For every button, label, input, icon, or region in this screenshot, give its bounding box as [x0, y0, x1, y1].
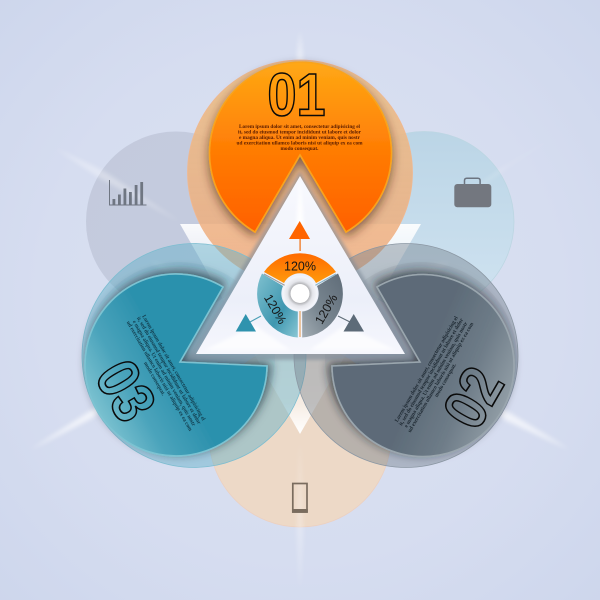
- text block 03: e magna aliqua. Ut enim ad minim veniam, quis nostr: [131, 320, 197, 428]
- text block 01: e magna aliqua. Ut enim ad minim veniam, quis nostr: [239, 135, 360, 141]
- centre pie chart: [257, 253, 343, 338]
- back circle: grey: [86, 132, 266, 312]
- panel 02: slate pie: [332, 275, 517, 457]
- marker: slate triangle: [338, 314, 364, 332]
- number 01: 01: [268, 62, 326, 128]
- separators: [264, 274, 336, 337]
- slate outer translucent circle: [294, 244, 518, 468]
- hub centre: [290, 284, 310, 303]
- icon: smartphone: [292, 484, 308, 513]
- back circle: light blue: [334, 132, 514, 312]
- text block 02: Lorem ipsum dolor sit amet, consectetur adipisicing el: [394, 315, 460, 423]
- text block 03: ud exercitation ullamco laboris nisi ut aliquip ex ea com: [125, 320, 193, 433]
- teal outer translucent circle: [82, 244, 306, 468]
- large pale inverted triangle: [180, 224, 421, 434]
- text block 02: e magna aliqua. Ut enim ad minim veniam, quis nostr: [404, 321, 469, 429]
- text block 02: it, sed do eiusmod tempor incididunt ut labore et dolor: [398, 317, 465, 427]
- offset glass ring: teal: [83, 262, 275, 454]
- number 02: 02: [430, 356, 517, 440]
- label: 120% orange: 120%: [284, 260, 316, 274]
- text block 01: [236, 124, 363, 152]
- panel 01: orange pie: [210, 62, 392, 232]
- marker: teal triangle: [236, 314, 261, 332]
- icon: briefcase: [454, 178, 491, 207]
- text block 02: ud exercitation ullamco laboris nisi ut aliquip ex ea com: [407, 321, 475, 434]
- text block 01: ud exercitation ullamco laboris nisi ut aliquip ex ea com: [236, 141, 363, 147]
- segment: teal 120%: [257, 274, 298, 338]
- triangle highlights: [205, 180, 395, 350]
- segment: slate 120%: [302, 274, 343, 338]
- text block 01: it, sed do eiusmod tempor incididunt ut labore et dolor: [238, 130, 361, 136]
- number 03: 03: [82, 349, 169, 433]
- label: 120% slate: 120%: [312, 292, 340, 327]
- segment: orange 120%: [264, 253, 336, 283]
- text block 03: modo consequat.: [142, 361, 166, 397]
- central white triangle: [196, 176, 405, 354]
- hub ring: [282, 276, 318, 311]
- marker: orange triangle: [289, 221, 310, 251]
- text block 01: Lorem ipsum dolor sit amet, consectetur adipisicing el: [239, 124, 360, 130]
- icon: bar chart: [109, 180, 146, 206]
- offset glass ring: slate: [325, 262, 517, 454]
- central triangle frame: [186, 172, 414, 360]
- text block 01: modo consequat.: [280, 146, 319, 152]
- panel 03: teal pie: [82, 274, 267, 456]
- back circle: peach: [209, 345, 391, 527]
- orange outer translucent circle: [188, 60, 412, 285]
- text block 02: modo consequat.: [434, 362, 458, 398]
- text block 03: Lorem ipsum dolor sit amet, consectetur adipisicing el: [140, 314, 206, 422]
- label: 120% teal: 120%: [261, 292, 289, 327]
- text block 03: it, sed do eiusmod tempor incididunt ut labore et dolor: [135, 316, 202, 426]
